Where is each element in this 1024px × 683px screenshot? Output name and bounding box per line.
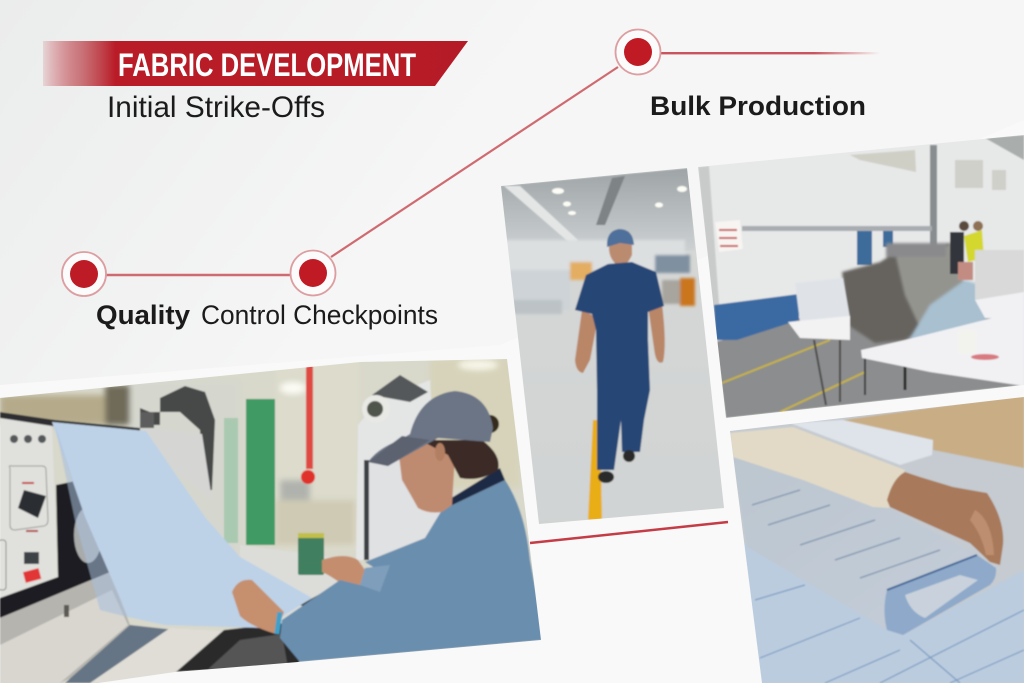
hair <box>420 440 499 479</box>
green column <box>246 399 275 545</box>
far hand <box>320 555 366 586</box>
control panel <box>0 415 58 598</box>
fabric sheet <box>52 422 312 628</box>
wall sign <box>715 220 743 252</box>
timeline node 3 <box>616 30 660 74</box>
panel: photo of technician inspecting fabric at machine <box>0 355 545 683</box>
black machine body <box>0 478 112 618</box>
red divider line under photos <box>530 522 728 543</box>
heading banner <box>43 41 468 86</box>
head <box>609 240 632 266</box>
clipboard chart <box>795 278 850 322</box>
background people and machines <box>950 232 964 274</box>
dark folded material <box>300 595 318 607</box>
shoes <box>598 471 614 483</box>
panel: photo of production hall with sample table <box>695 130 1024 425</box>
fabric roll <box>733 457 977 630</box>
timeline node 1 <box>62 252 106 296</box>
roll end <box>884 555 996 635</box>
panel: photo of worker walking in factory aisle <box>495 165 730 530</box>
cap <box>368 391 493 466</box>
technician <box>232 391 545 662</box>
jacket <box>280 480 545 662</box>
label: quality control checkpoints: Quality <box>96 300 190 330</box>
hand <box>887 472 1003 565</box>
grey floor <box>718 318 1020 418</box>
white fabric stack <box>790 420 933 465</box>
bench <box>240 546 337 624</box>
cream sleeve <box>730 427 905 508</box>
label: quality control checkpoints <box>96 300 438 330</box>
secondary machine panel <box>199 432 212 492</box>
neck and face <box>398 437 455 512</box>
blurred factory background <box>0 358 520 560</box>
timeline node 2 <box>290 250 336 296</box>
label: quality control checkpoints: Control Checkpoints <box>201 300 438 330</box>
arms <box>575 310 598 373</box>
white table <box>861 310 1024 386</box>
timeline connector lines <box>106 52 880 275</box>
black roller opening <box>176 622 300 672</box>
red pipe <box>306 364 313 469</box>
front table with grid <box>740 540 1024 683</box>
table legs <box>814 340 826 405</box>
heading text: FABRIC DEVELOPMENT <box>118 47 416 83</box>
yellow floor line <box>588 420 602 520</box>
coverall <box>575 262 664 470</box>
blue wall skirting <box>714 294 799 340</box>
near hand <box>232 580 284 634</box>
worker <box>575 229 665 483</box>
green tin <box>298 534 324 575</box>
subheading: initial strike-offs: Initial Strike-Offs <box>107 91 325 124</box>
label: bulk production: Bulk Production <box>650 91 866 121</box>
fabric piles <box>842 243 992 345</box>
cardboard backdrop <box>843 395 1024 468</box>
panel icons <box>9 466 48 530</box>
ceiling <box>501 168 694 250</box>
panel: photo of hand placing fabric roll on a table <box>728 395 1024 683</box>
distant hall <box>505 240 695 314</box>
machine bed <box>0 572 130 682</box>
white machine with roller <box>356 380 440 560</box>
dark mechanism <box>140 386 215 490</box>
